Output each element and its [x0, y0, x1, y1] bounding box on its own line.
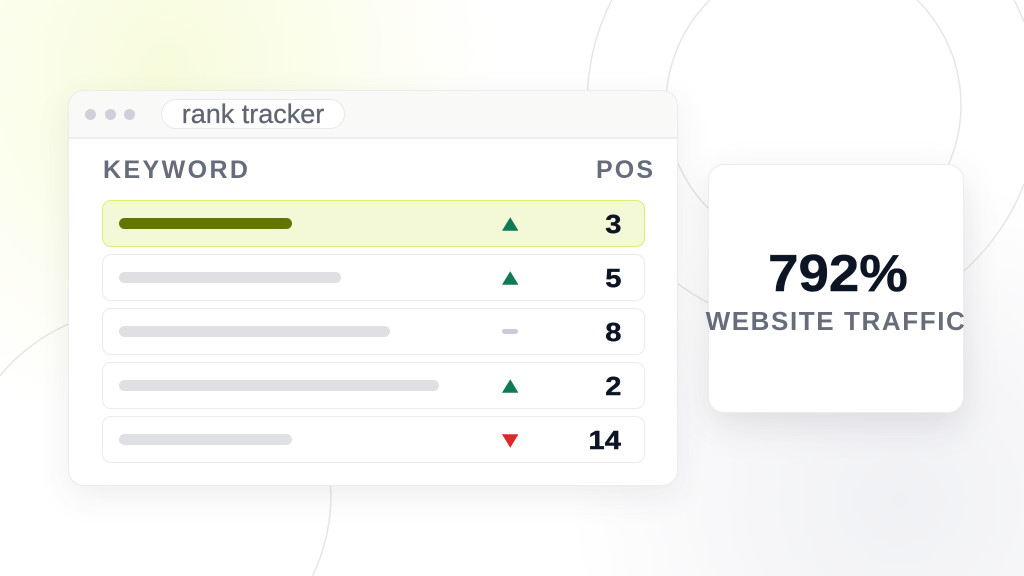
down arrow	[502, 434, 518, 448]
row 5	[102, 416, 645, 463]
up arrow	[502, 271, 518, 285]
keyword bar	[118, 218, 292, 228]
stat value: 792%	[768, 245, 908, 303]
keyword bar	[118, 380, 438, 390]
row 1: highlighted keyword	[102, 200, 645, 247]
row 4	[102, 362, 645, 409]
panel: rank tracker window	[68, 90, 678, 486]
keyword bar	[118, 272, 340, 282]
position 3: 3	[605, 209, 621, 239]
keyword bar	[118, 326, 390, 336]
neutral dash	[502, 328, 518, 334]
row 2	[102, 254, 645, 301]
position 8: 8	[605, 317, 621, 347]
up arrow	[502, 379, 518, 393]
keyword bar	[118, 434, 292, 444]
window control dots	[85, 109, 135, 120]
position 5: 5	[605, 263, 621, 293]
stat label: WEBSITE TRAFFIC	[706, 306, 966, 336]
position 14: 14	[589, 425, 621, 455]
up arrow	[502, 217, 518, 231]
title pill: rank tracker: rank tracker	[182, 99, 324, 129]
window title bar	[69, 91, 677, 139]
column heading: position: POS	[596, 156, 655, 184]
panel: traffic stat card	[708, 164, 964, 413]
row 3	[102, 308, 645, 355]
column heading: keyword: KEYWORD	[103, 156, 250, 184]
position 2: 2	[605, 371, 621, 401]
